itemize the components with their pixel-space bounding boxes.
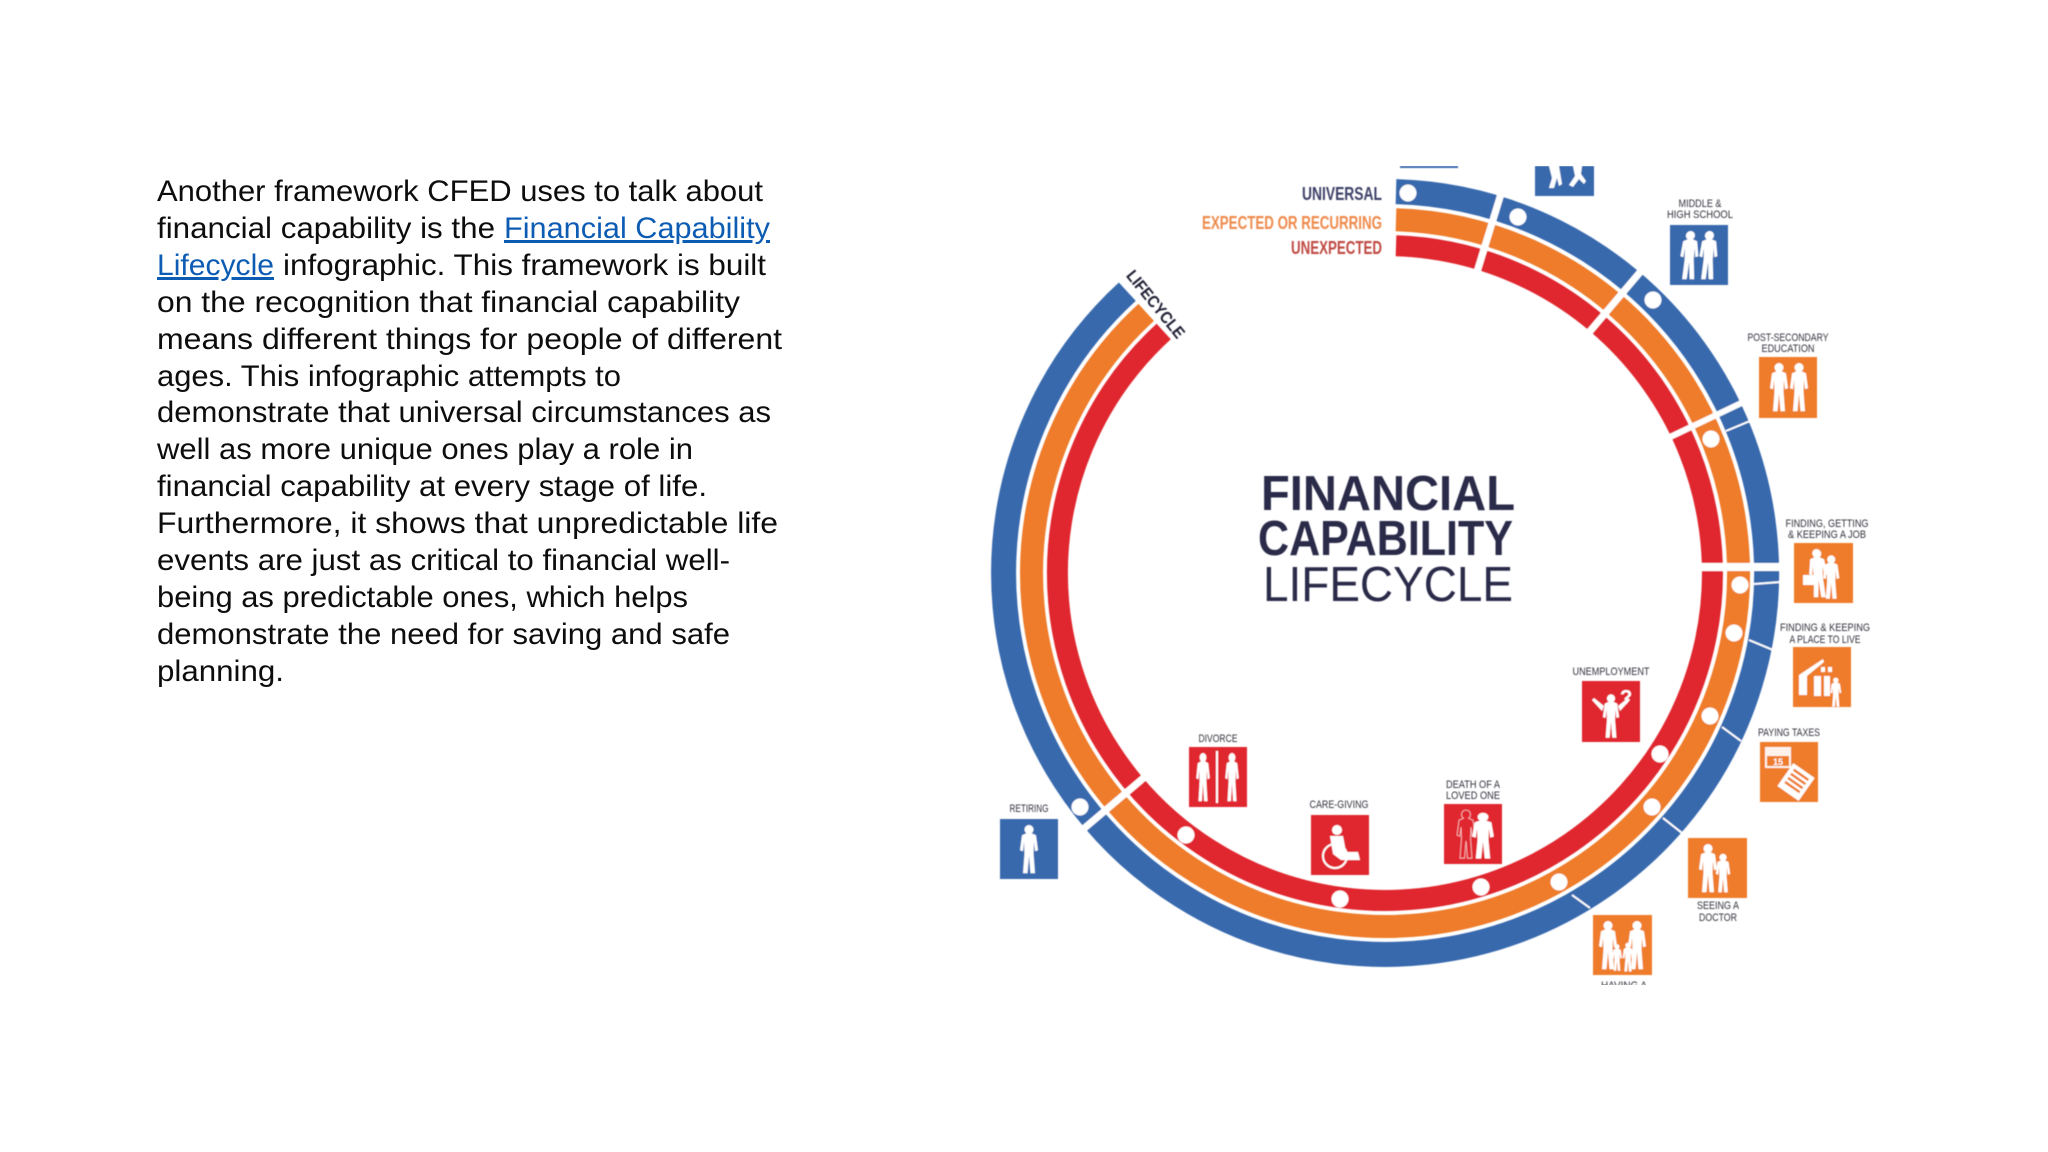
- label: MIDDLE &: [1678, 198, 1722, 210]
- label: [1697, 900, 1740, 924]
- icon: seeing a doctor: [1688, 838, 1747, 924]
- text block: framework description: Furthermore, it shows that unpredictable life: [157, 507, 778, 540]
- ring label: lifecycle: LIFECYCLE: [1122, 267, 1188, 342]
- label: SEEING A: [1697, 900, 1740, 912]
- icon: having a family: [1593, 915, 1652, 992]
- milestone dots: [1072, 184, 1748, 908]
- icon: finding, getting and keeping a job: [1786, 518, 1868, 603]
- label: LOVED ONE: [1446, 790, 1500, 802]
- text block: framework description: means different things for people of different: [157, 323, 783, 356]
- label: HIGH SCHOOL: [1667, 209, 1733, 221]
- label: [1667, 198, 1733, 221]
- text block: framework description: financial capability is the: [157, 212, 495, 245]
- top clipped rule: [1400, 166, 1458, 168]
- text block: framework description: Lifecycle: [157, 249, 274, 282]
- text block: framework description: demonstrate that universal circumstances as: [157, 396, 771, 429]
- title: FINANCIAL: [1261, 466, 1515, 521]
- ring: expected or recurring (orange): [1032, 220, 1739, 927]
- icon: care-giving: [1310, 799, 1369, 875]
- legend: UNIVERSAL: [1302, 184, 1382, 204]
- text block: framework description: Another framework CFED uses to talk about: [157, 175, 764, 208]
- ring: unexpected (red): [1057, 246, 1712, 901]
- label: DEATH OF A: [1446, 779, 1501, 791]
- text block: framework description: demonstrate the need for saving and safe: [157, 618, 730, 651]
- text block: framework description: on the recognition that financial capability: [157, 286, 740, 319]
- icon: paying taxes: [1758, 727, 1820, 802]
- infographic: financial capability lifecycle wheel: [1000, 166, 1870, 992]
- label: & KEEPING A JOB: [1788, 529, 1866, 541]
- label: FINDING, GETTING: [1786, 518, 1868, 530]
- label: DOCTOR: [1699, 912, 1737, 924]
- label: RETIRING: [1010, 803, 1048, 815]
- label: DIVORCE: [1198, 733, 1238, 745]
- legend: UNEXPECTED: [1291, 238, 1382, 258]
- icon: paying taxes: 15: [1773, 757, 1783, 767]
- icon: finding and keeping a place to live: [1780, 622, 1870, 707]
- icon: elementary school (clipped): [1535, 166, 1594, 196]
- text block: framework description: events are just as critical to financial well-: [157, 544, 730, 577]
- title: CAPABILITY: [1258, 511, 1513, 566]
- text block: framework description: well as more unique ones play a role in: [156, 433, 693, 466]
- text block: framework description: financial capability at every stage of life.: [157, 470, 707, 503]
- icon: retiring: [1000, 803, 1058, 879]
- label: UNEMPLOYMENT: [1572, 666, 1650, 678]
- ring separators: [1081, 190, 1785, 908]
- label: CARE-GIVING: [1310, 799, 1368, 811]
- icon: post-secondary education: [1748, 332, 1829, 418]
- label: [1786, 518, 1868, 541]
- text block: framework description: ages. This infographic attempts to: [157, 360, 621, 393]
- text block: framework description: infographic. This framework is built: [283, 249, 767, 282]
- label: EDUCATION: [1762, 343, 1815, 355]
- icon: divorce: [1189, 733, 1247, 807]
- label: [1780, 622, 1870, 646]
- title: [1258, 474, 1514, 602]
- legend: EXPECTED OR RECURRING: [1202, 213, 1382, 233]
- ring: universal (blue): [1004, 192, 1767, 954]
- text block: framework description: planning.: [157, 655, 284, 688]
- icon: unemployment: ?: [1620, 687, 1632, 709]
- label: PAYING TAXES: [1758, 727, 1820, 739]
- label: HAVING A: [1601, 980, 1648, 992]
- icon: death of a loved one: [1444, 779, 1502, 864]
- label: POST-SECONDARY: [1748, 332, 1829, 344]
- label: FINDING & KEEPING: [1780, 622, 1870, 634]
- label: [1446, 780, 1500, 800]
- icon: unemployment: [1572, 666, 1650, 742]
- text block: framework description: Financial Capability: [504, 212, 770, 245]
- icon: middle and high school: [1667, 198, 1733, 285]
- text block: framework description: [156, 175, 783, 688]
- text block: framework description: being as predictable ones, which helps: [157, 581, 688, 614]
- title: LIFECYCLE: [1263, 557, 1513, 612]
- label: A PLACE TO LIVE: [1790, 634, 1860, 646]
- label: [1747, 332, 1829, 353]
- legend: [1202, 184, 1382, 258]
